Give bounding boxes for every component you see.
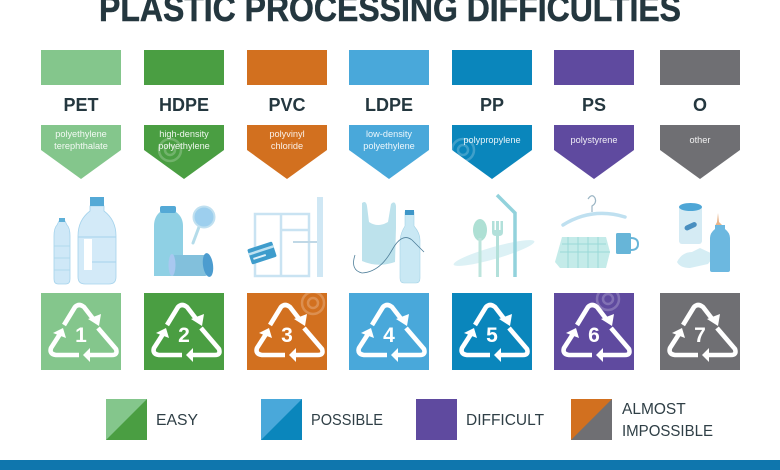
legend: easy: EASY xyxy=(156,412,198,429)
HDPE code: HDPE xyxy=(159,95,209,115)
recycling symbol 2 xyxy=(144,293,224,370)
panel: PVC xyxy=(247,50,327,370)
PET description tag: terephthalate xyxy=(54,141,108,151)
HDPE description tag: polyethylene xyxy=(158,141,210,151)
recycling symbol 7: 7 xyxy=(694,324,706,347)
PP description tag: polypropylene xyxy=(463,135,521,145)
O colour bar xyxy=(660,50,740,85)
LDPE description tag xyxy=(349,125,429,179)
HDPE description tag: high-density xyxy=(159,129,209,139)
recycling symbol 7 xyxy=(660,293,740,370)
legend: difficult: DIFFICULT xyxy=(466,412,545,429)
panel: PS xyxy=(554,50,638,370)
LDPE code: LDPE xyxy=(365,95,413,115)
PET description tag xyxy=(41,125,121,179)
panel: LDPE xyxy=(349,50,429,370)
icon: bottle, mirror and tube xyxy=(154,206,215,278)
PVC colour bar xyxy=(247,50,327,85)
PVC code: PVC xyxy=(268,95,306,115)
legend: difficult xyxy=(416,399,545,440)
PS description tag: polystyrene xyxy=(571,135,617,145)
recycling symbol 1: 1 xyxy=(75,324,87,347)
O code: O xyxy=(693,95,707,115)
recycling symbol 2: 2 xyxy=(178,324,190,347)
LDPE description tag: polyethylene xyxy=(363,141,415,151)
PET description tag: polyethylene xyxy=(55,129,107,139)
icon: window, pipe and card xyxy=(247,197,323,277)
PP code: PP xyxy=(480,95,504,115)
recycling symbol 1 xyxy=(41,293,121,370)
LDPE description tag: low-density xyxy=(366,129,412,139)
icon: jar, baby bottle and wrap xyxy=(677,203,730,272)
HDPE colour bar xyxy=(144,50,224,85)
O description tag xyxy=(660,125,740,179)
recycling symbol 3 xyxy=(247,292,327,370)
PP colour bar xyxy=(452,50,532,85)
O description tag: other xyxy=(690,135,710,145)
recycling symbol 6: 6 xyxy=(588,324,600,347)
panel: HDPE xyxy=(144,50,224,370)
panel: PP xyxy=(452,50,536,370)
recycling symbol 6 xyxy=(554,288,634,370)
HDPE description tag xyxy=(144,125,224,179)
PVC description tag: polyvinyl xyxy=(269,129,305,139)
legend: almost impossible: IMPOSSIBLE xyxy=(622,423,713,440)
legend: possible: POSSIBLE xyxy=(311,412,383,429)
PP description tag xyxy=(452,125,532,179)
legend xyxy=(106,399,713,440)
PS code: PS xyxy=(582,95,606,115)
icon: cutlery, plate and straw xyxy=(452,195,536,277)
PS description tag xyxy=(554,125,634,179)
recycling symbol 4 xyxy=(349,293,429,370)
PET code: PET xyxy=(63,95,99,115)
PET colour bar xyxy=(41,50,121,85)
recycling symbol 4: 4 xyxy=(383,324,395,347)
panel: PET xyxy=(41,50,121,370)
recycling symbol 5: 5 xyxy=(486,324,498,347)
PVC description tag xyxy=(247,125,327,179)
legend: almost impossible: ALMOST xyxy=(622,401,686,418)
LDPE colour bar xyxy=(349,50,429,85)
icon: water bottles xyxy=(54,197,116,284)
recycling symbol 3: 3 xyxy=(281,324,293,347)
legend: possible xyxy=(261,399,383,440)
legend: almost impossible xyxy=(571,399,713,440)
recycling symbol 5 xyxy=(452,293,532,370)
PVC description tag: chloride xyxy=(271,141,303,151)
icon: plastic bag, bottle and cable xyxy=(354,202,424,283)
legend: easy xyxy=(106,399,198,440)
footer bar xyxy=(0,460,780,470)
PS colour bar xyxy=(554,50,634,85)
panel: O xyxy=(660,50,740,370)
icon: hanger, egg tray and mug xyxy=(555,196,638,268)
